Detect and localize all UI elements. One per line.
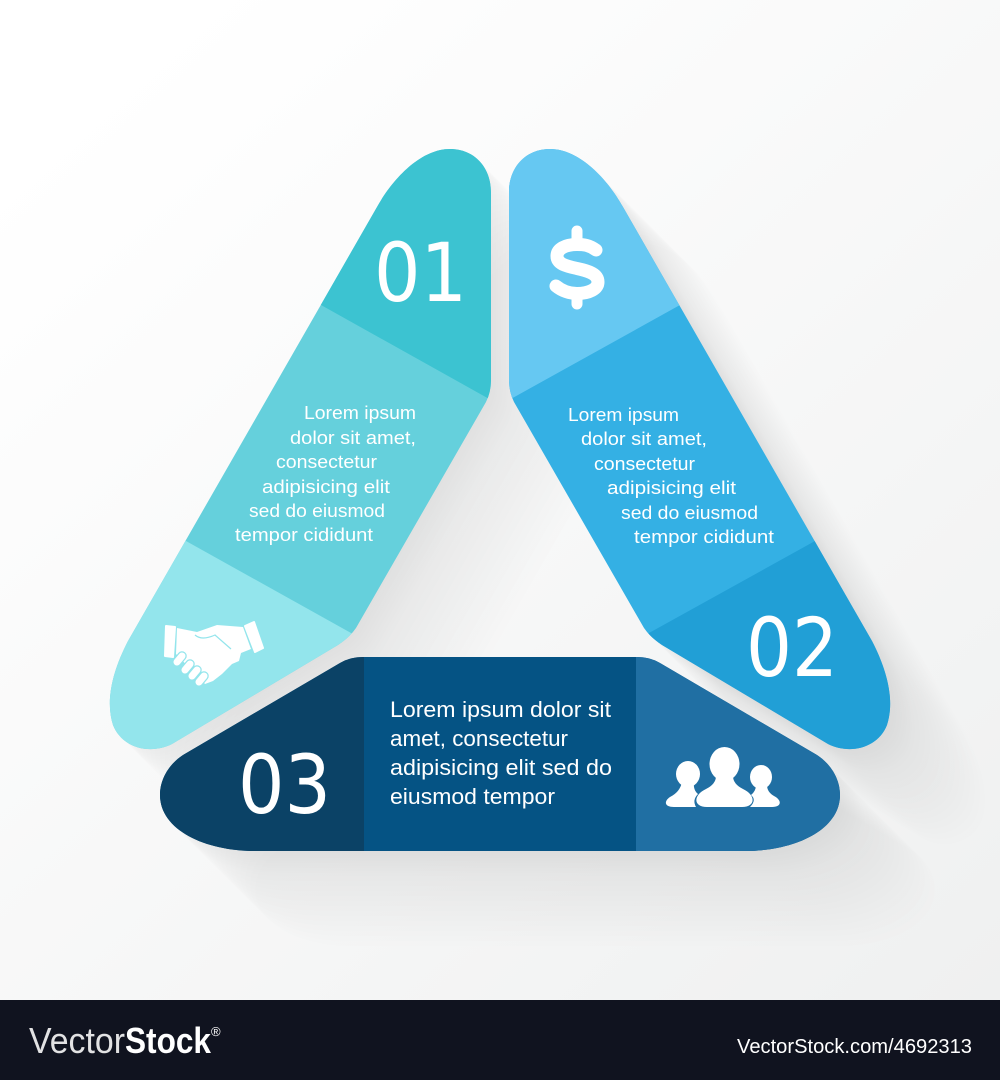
text block 03: Lorem ipsum dolor sit [390, 697, 611, 722]
footer image id: VectorStock.com/4692313 [737, 1036, 972, 1058]
text block 02: consectetur [594, 453, 695, 474]
text block 03: adipisicing elit sed do [390, 755, 612, 780]
text block 01: tempor cididunt [235, 524, 373, 545]
number 01: 01 [374, 227, 467, 321]
text block 01: sed do eiusmod [249, 500, 385, 521]
text block 02 [568, 404, 774, 547]
icon: handshake [165, 622, 263, 684]
text block 02: Lorem ipsum [568, 404, 679, 425]
text block 03: eiusmod tempor [390, 784, 555, 809]
footer logo: ® [211, 1024, 221, 1039]
footer logo: Stock [125, 1020, 212, 1061]
text block 02: dolor sit amet, [581, 428, 707, 449]
text block 02: adipisicing elit [607, 477, 736, 498]
long shadows [110, 149, 985, 946]
text block 01: dolor sit amet, [290, 427, 416, 448]
footer bar [0, 1000, 1000, 1080]
panel 01: teal arm [110, 149, 491, 750]
text block 02: sed do eiusmod [621, 502, 758, 523]
panel 02: blue arm [509, 149, 890, 750]
text block 02: tempor cididunt [634, 526, 774, 547]
text block 01: consectetur [276, 451, 377, 472]
number 03: 03 [238, 739, 331, 833]
footer logo: Vector [29, 1020, 125, 1061]
footer logo [29, 1020, 221, 1061]
icon: dollar sign [556, 231, 598, 304]
text block 01: adipisicing elit [262, 476, 390, 497]
text block 03: amet, consectetur [390, 726, 568, 751]
panel 03: navy arm [160, 657, 840, 851]
text block 03 [390, 697, 612, 809]
number 02: 02 [746, 602, 838, 696]
text block 01 [235, 402, 416, 545]
text block 01: Lorem ipsum [304, 402, 416, 423]
icon: people [666, 747, 780, 807]
